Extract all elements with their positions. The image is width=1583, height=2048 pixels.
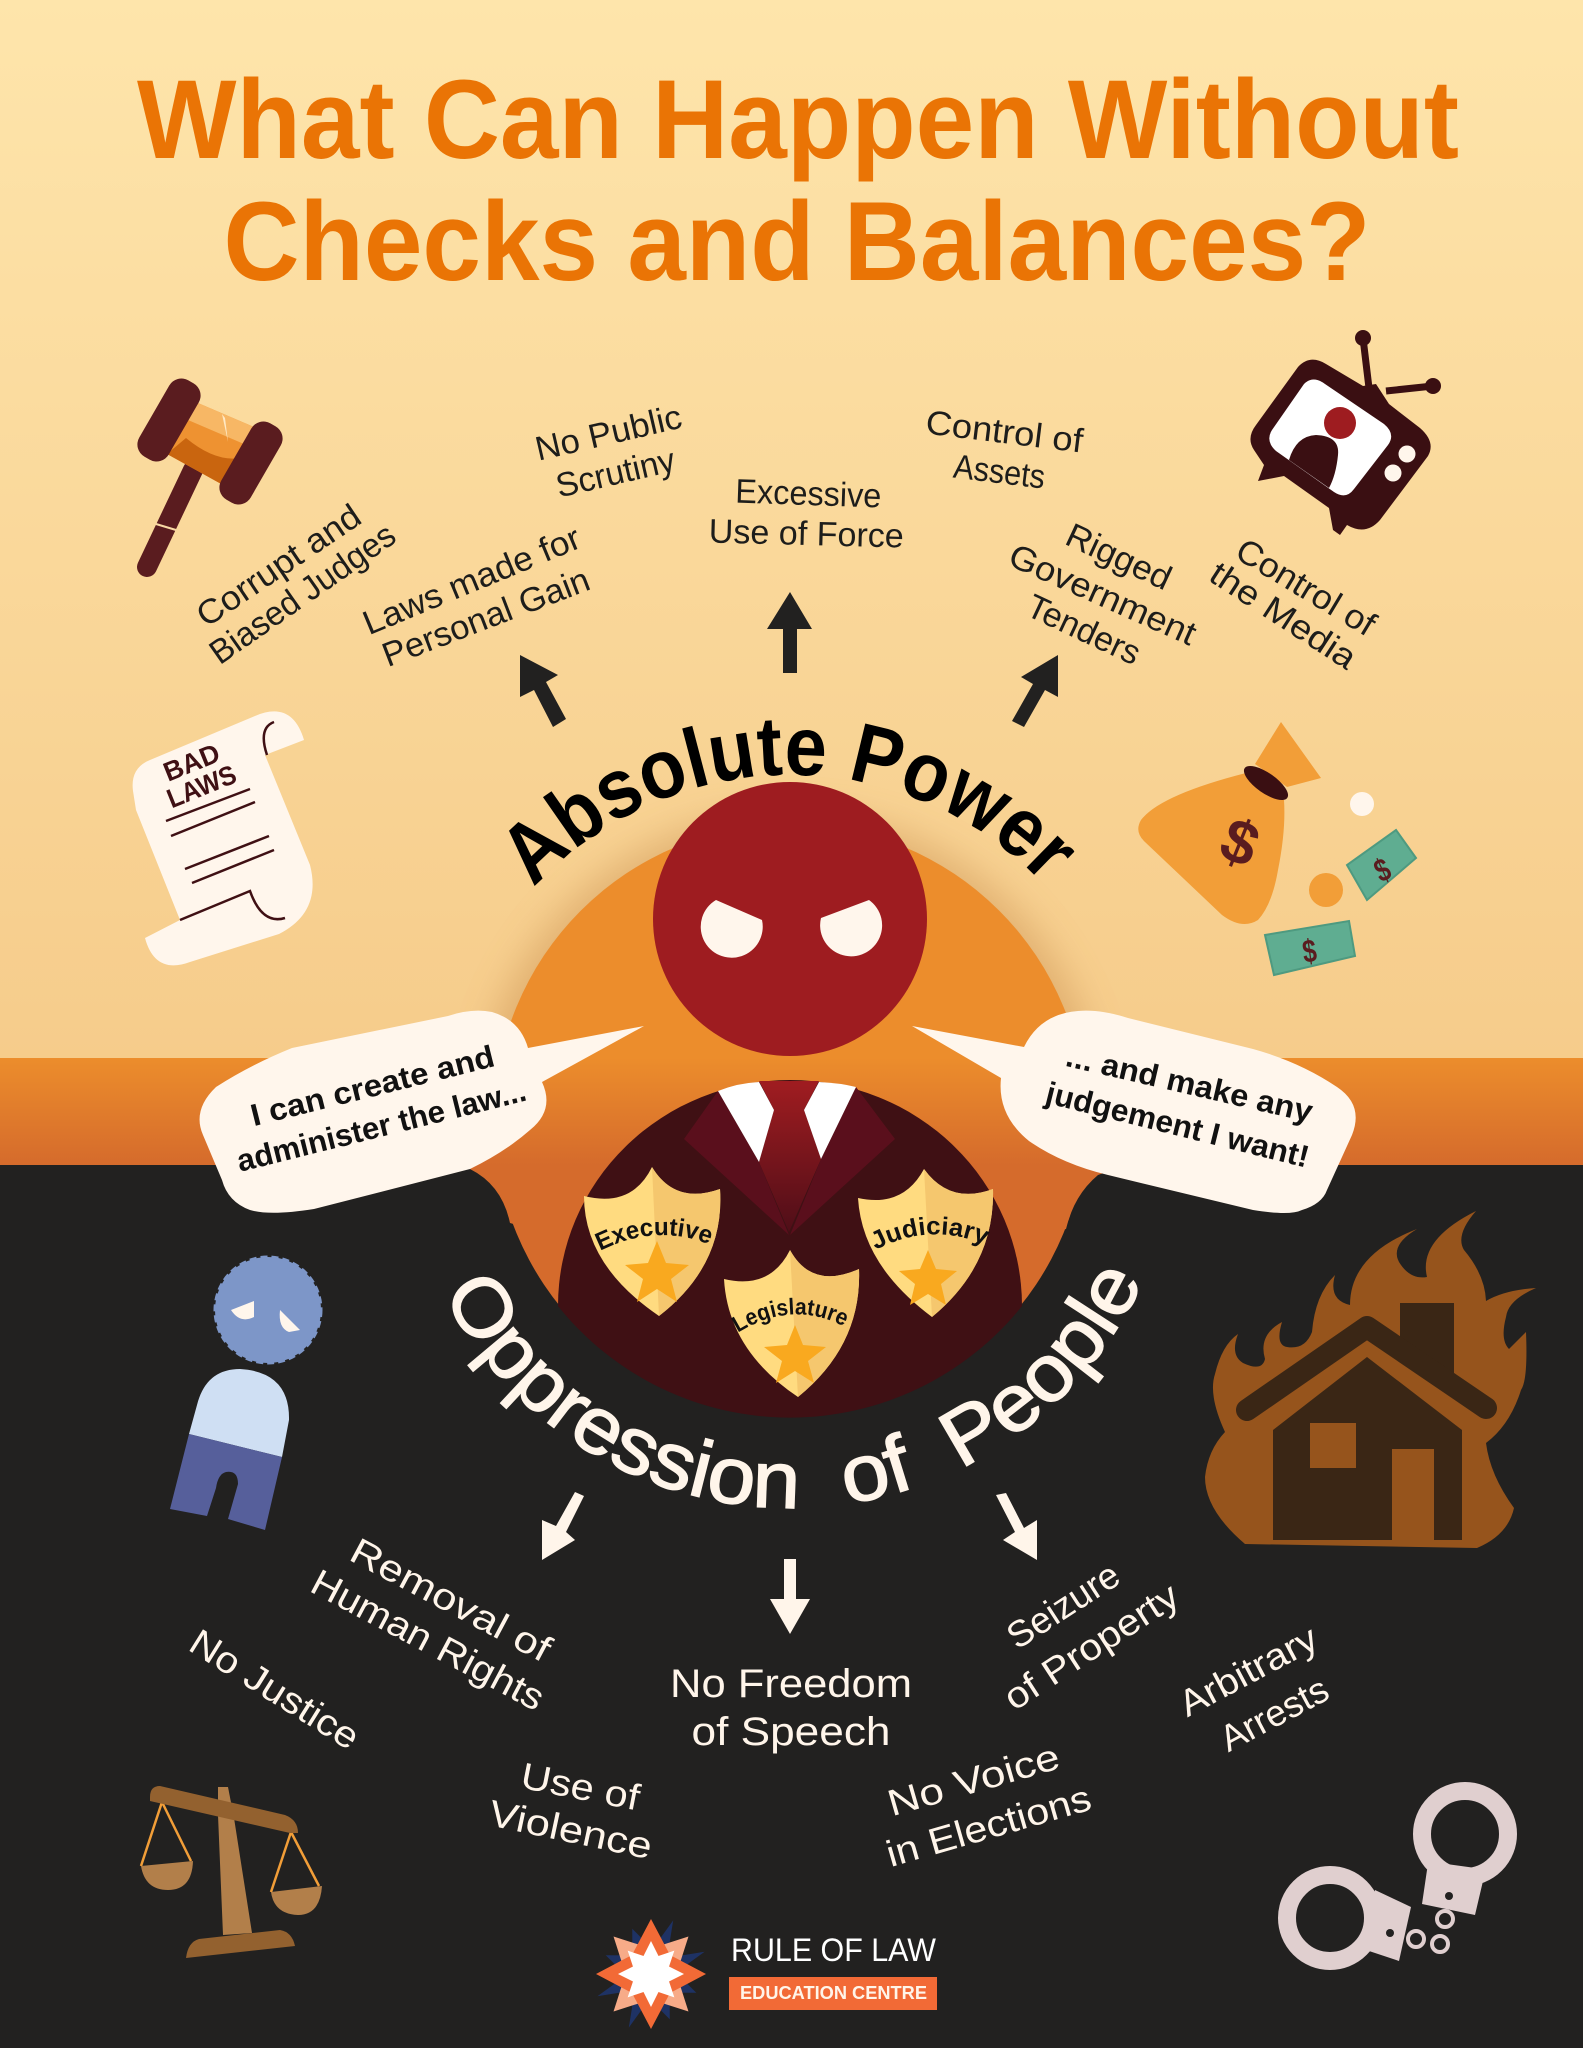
text: rigged government tenders: Government bbox=[1003, 537, 1203, 653]
icon: broken scales bbox=[141, 1786, 322, 1958]
shield: executive bbox=[584, 1167, 720, 1316]
halo behind central circle bbox=[489, 815, 1091, 1022]
text: use of violence: Violence bbox=[485, 1792, 656, 1867]
icon: house on fire bbox=[1205, 1211, 1536, 1548]
icon: money bag with banknotes bbox=[1138, 722, 1416, 975]
speech bubble: left bbox=[200, 1011, 644, 1213]
text: laws made for personal gain: Personal Gain bbox=[377, 561, 595, 675]
text: control of assets: Assets bbox=[951, 448, 1047, 497]
speech bubble: left: administer the law... bbox=[233, 1073, 530, 1179]
icon: bad laws scroll bbox=[133, 711, 313, 965]
text: rigged government tenders: Tenders bbox=[1021, 587, 1147, 673]
speech bubble: right: judgement I want! bbox=[1041, 1075, 1313, 1174]
background: orange band bbox=[0, 1058, 1583, 1165]
text: rigged government tenders bbox=[1003, 516, 1203, 673]
text: excessive use of force: Excessive bbox=[735, 472, 882, 516]
shield: executive: Executive bbox=[594, 1218, 712, 1250]
title: Checks and Balances? bbox=[224, 179, 1370, 304]
heading: oppression of people: Oppression of People bbox=[452, 1270, 1138, 1509]
text: control of assets bbox=[924, 404, 1086, 497]
logo: education centre tag bbox=[729, 1977, 937, 2010]
title bbox=[137, 57, 1459, 304]
text: laws made for personal gain: Laws made for bbox=[357, 519, 586, 643]
text: no freedom of speech: of Speech bbox=[692, 1710, 890, 1754]
text: no public scrutiny: Scrutiny bbox=[552, 441, 679, 505]
text: no justice: No Justice bbox=[182, 1621, 367, 1758]
arrow: down right bbox=[996, 1493, 1037, 1560]
text: excessive use of force: Use of Force bbox=[708, 512, 904, 556]
text: no public scrutiny: No Public bbox=[532, 398, 685, 469]
heading: absolute power: Absolute Power bbox=[509, 720, 1074, 886]
text: seizure of property: Seizure bbox=[999, 1554, 1127, 1657]
text: removal of human rights bbox=[304, 1530, 559, 1719]
text: no public scrutiny bbox=[532, 398, 685, 505]
text: seizure of property: of Property bbox=[996, 1575, 1187, 1718]
text: control of the media: the Media bbox=[1203, 554, 1363, 677]
arrow: up right bbox=[1012, 655, 1058, 727]
icon: sad person bbox=[170, 1257, 321, 1530]
shield: judiciary bbox=[858, 1169, 994, 1317]
text: removal of human rights: Removal of bbox=[344, 1530, 559, 1670]
central orange circle with flares bbox=[440, 824, 1140, 1416]
icon: money bag with banknotes: $ bbox=[1211, 805, 1269, 881]
figure: dictator head bbox=[653, 782, 927, 1056]
arrow: down centre bbox=[770, 1559, 810, 1634]
speech bubble: right: ... and make any bbox=[1063, 1038, 1317, 1129]
title: What Can Happen Without bbox=[137, 57, 1459, 182]
shield: legislature: Legislature bbox=[731, 1298, 847, 1332]
text: removal of human rights: Human Rights bbox=[304, 1561, 551, 1719]
text: control of the media: Control of bbox=[1229, 531, 1383, 644]
speech bubble: left: I can create and bbox=[247, 1039, 498, 1133]
arrow: up centre bbox=[767, 592, 812, 673]
logo: star emblem bbox=[576, 1899, 726, 2048]
text: rigged government tenders: Rigged bbox=[1060, 516, 1177, 598]
text: control of the media bbox=[1203, 531, 1383, 677]
background: sky bbox=[0, 0, 1583, 1058]
shield: judiciary: Judiciary bbox=[873, 1216, 990, 1248]
text: no voice in elections bbox=[881, 1736, 1096, 1875]
text: corrupt and biased judges: Biased Judges bbox=[203, 516, 403, 672]
arrow: up left bbox=[520, 655, 566, 727]
icon: handcuffs bbox=[1287, 1791, 1508, 1961]
text: no voice in elections: No Voice bbox=[883, 1736, 1064, 1824]
text: no freedom of speech: No Freedom bbox=[670, 1662, 912, 1706]
icon: money bag with banknotes: $ bbox=[1300, 933, 1319, 971]
arrow: down left bbox=[542, 1492, 584, 1560]
shield: legislature bbox=[724, 1250, 860, 1397]
text: no voice in elections: in Elections bbox=[881, 1777, 1096, 1875]
icon: broken gavel bbox=[132, 373, 288, 567]
icon: television bbox=[1250, 330, 1441, 535]
background: dark ground bbox=[0, 1165, 1583, 2048]
logo: organisation name: RULE OF LAW bbox=[731, 1932, 937, 1968]
text: no freedom of speech bbox=[670, 1662, 912, 1754]
speech bubble: right bbox=[912, 1011, 1356, 1213]
text: use of violence bbox=[485, 1755, 656, 1867]
icon: money bag with banknotes: $ bbox=[1369, 852, 1397, 890]
text: arbitrary arrests bbox=[1172, 1617, 1335, 1760]
icon: bad laws scroll: LAWS bbox=[163, 759, 241, 814]
text: use of violence: Use of bbox=[518, 1755, 644, 1818]
text: excessive use of force bbox=[708, 472, 904, 556]
text: corrupt and biased judges: Corrupt and bbox=[189, 497, 368, 635]
logo: education centre tag: EDUCATION CENTRE bbox=[740, 1983, 927, 2003]
text: arbitrary arrests: Arrests bbox=[1213, 1668, 1335, 1760]
icon: bad laws scroll: BAD bbox=[159, 738, 224, 787]
text: control of assets: Control of bbox=[924, 404, 1086, 461]
text: arbitrary arrests: Arbitrary bbox=[1172, 1617, 1325, 1725]
figure: dictator body in suit bbox=[558, 1080, 1022, 1418]
